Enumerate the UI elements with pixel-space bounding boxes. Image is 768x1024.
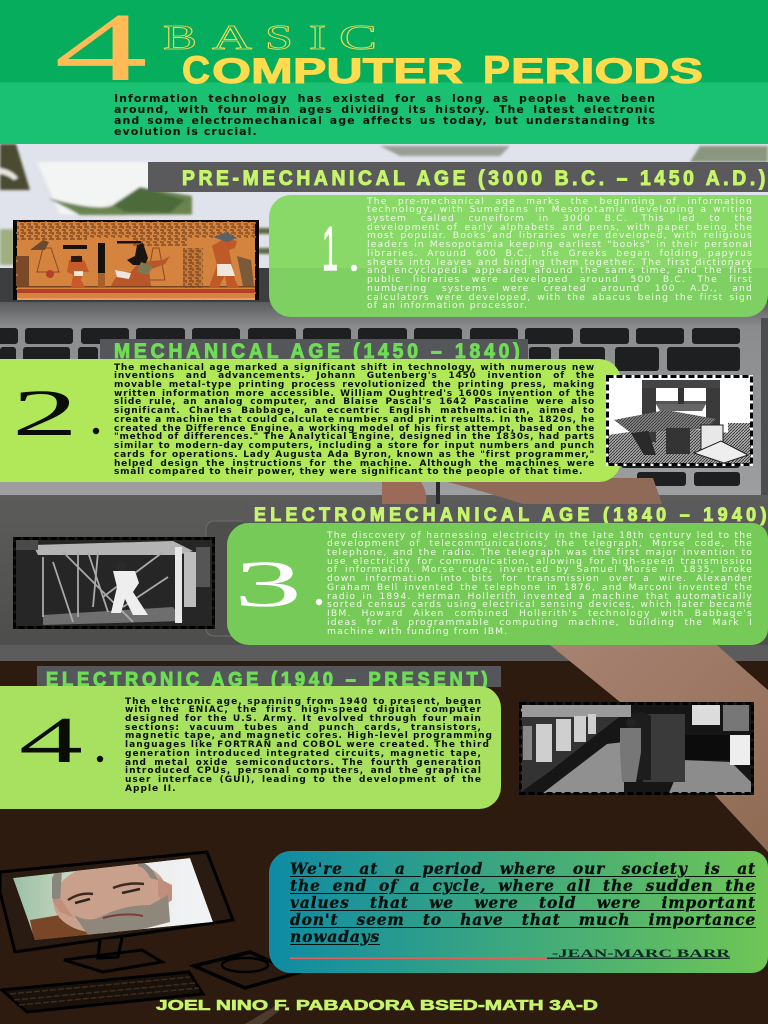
intro text: evolution is crucial. bbox=[114, 125, 258, 138]
heading bar: pre-mechanical age: PRE-MECHANICAL AGE (3000 B.C. – 1450 A.D.) bbox=[182, 167, 765, 190]
text: electromechanical age: use electricity for communication, allowing for high-speed transmission bbox=[327, 556, 753, 567]
panel: quote bbox=[269, 851, 768, 973]
text: electronic age: with the ENIAC, the first high-speed digital computer bbox=[125, 705, 482, 715]
number 2: 2 bbox=[12, 377, 78, 450]
portrait photo bbox=[13, 858, 213, 940]
number 1: 1 bbox=[322, 215, 338, 284]
quote text: We're at a period where our society is at bbox=[290, 859, 756, 878]
image: ENIAC computer bbox=[519, 702, 754, 795]
intro text: Information technology has existed for as long as people have been bbox=[114, 92, 656, 105]
text: electromechanical age: of information. Morse code, invented by Samuel Morse in 1835, broke bbox=[327, 564, 753, 575]
image: Egyptian papyrus bbox=[13, 220, 259, 300]
text: pre-mechanical age: leaders in Mesopotamia keeping earliest "books" in their personal bbox=[367, 239, 753, 250]
monitor screen frame bbox=[0, 852, 233, 952]
text: electronic age: sections: vacuum tubes and punch cards, transistors, bbox=[125, 723, 482, 733]
text: electromechanical age: development of telecommunications, the telegraph, Morse code, the bbox=[327, 538, 753, 549]
quote attribution: -JEAN-MARC BARR bbox=[552, 948, 731, 960]
mouse pad and mouse bbox=[194, 952, 297, 988]
word: Basic: C bbox=[339, 18, 377, 57]
number 4 bbox=[19, 704, 104, 777]
quote text: nowadays bbox=[290, 927, 380, 946]
text: electromechanical age: down information into bits for transmission over a wire. Alexander bbox=[327, 573, 753, 584]
text: pre-mechanical age: development of early alphabets and pens, with paper being the bbox=[367, 222, 753, 233]
text: pre-mechanical age: of an information processor. bbox=[367, 300, 528, 311]
text: mechanical age: small compared to their power, they were significant to the people of that time. bbox=[114, 467, 583, 477]
panel: electronic age bbox=[0, 686, 501, 809]
left figures bbox=[30, 240, 49, 250]
text: electromechanical age: sorted census cards using electrical sensing devices, which later became bbox=[327, 599, 753, 610]
text: mechanical age: slide rule, an analog computer, and Blaise Pascal's 1642 Pascaline were also bbox=[114, 397, 595, 407]
word: Basic: A bbox=[212, 18, 253, 57]
text: pre-mechanical age: libraries. Around 600 B.C., the Greeks began folding papyrus bbox=[367, 248, 753, 259]
text: pre-mechanical age: system called cuneiform in 3000 B.C. This led to the bbox=[367, 213, 753, 224]
image: punch card machine operator bbox=[13, 537, 215, 629]
quote text: don't seem to have that much importance bbox=[290, 910, 756, 929]
heading bar: mechanical age: MECHANICAL AGE (1450 – 1840) bbox=[114, 340, 520, 363]
text: mechanical age: cards for operations. Lady Augusta Ada Byron, known as the "first programmer," bbox=[114, 450, 595, 460]
text: electromechanical age: ideas for a programmable computing machine, building the Mark I bbox=[327, 617, 753, 628]
text: electromechanical age bbox=[326, 530, 753, 636]
text: electromechanical age: machine with funding from IBM. bbox=[327, 626, 508, 636]
text: electronic age: Apple II. bbox=[125, 784, 177, 794]
text: pre-mechanical age: calculators were developed, with the abacus being the first sign bbox=[367, 292, 753, 302]
Anubis bbox=[111, 256, 170, 286]
green header band bbox=[0, 0, 768, 144]
quote text: values that we were told were important bbox=[290, 893, 756, 912]
number 3: 3 bbox=[234, 548, 302, 621]
text: pre-mechanical age: technology, with Sumerians in Mesopotamia developing a writing bbox=[367, 204, 753, 215]
text: pre-mechanical age: and encyclopedia appeared around the same time, and the first bbox=[367, 265, 753, 276]
text: mechanical age: The mechanical age marked a significant shift in technology, with numerous new bbox=[114, 363, 595, 373]
right god bbox=[209, 238, 239, 287]
text: electronic age: and metal oxide semiconductors. The fourth generation bbox=[125, 758, 482, 768]
text: electronic age: magnetic tape, and magnetic cores. High-level programming bbox=[125, 731, 493, 741]
image: printing press bbox=[606, 375, 753, 466]
text: mechanical age: movable metal-type printing process revolutionized the printing press, making bbox=[114, 380, 595, 390]
text: mechanical age: written information more accessible. William Oughtred's 1600s invention of the bbox=[114, 389, 595, 399]
text: pre-mechanical age: most popular. Books and libraries were developed, with religious bbox=[367, 230, 753, 241]
panel: pre-mechanical age bbox=[269, 195, 768, 317]
text: mechanical age: significant. Charles Babbage, an eccentric English mathematician, aimed to bbox=[114, 406, 595, 416]
word: Basic: B bbox=[163, 18, 197, 57]
word: Basic: I bbox=[309, 18, 326, 57]
text: electronic age: generation introduced integrated circuits, magnetic tape, bbox=[125, 749, 482, 759]
panel: mechanical age bbox=[0, 359, 621, 482]
scale and beam bbox=[63, 245, 87, 249]
quote text: the end of a cycle, where all the sudden the bbox=[290, 876, 756, 895]
text: electronic age: The electronic age, spanning from 1940 to present, began bbox=[125, 697, 482, 707]
text: mechanical age: created the Difference Engine, a working model of his first attempt, based on the bbox=[114, 424, 595, 434]
words: Computer Periods: P bbox=[483, 49, 510, 92]
footer credit: JOEL NINO F. PABADORA BSED-MATH 3A-D bbox=[156, 998, 598, 1014]
keyboard bbox=[2, 972, 203, 1012]
number 4: 4 bbox=[19, 704, 83, 777]
words: Computer Periods: C bbox=[182, 49, 210, 92]
text: pre-mechanical age: public libraries were developed around 500 B.C. The first bbox=[367, 274, 753, 285]
text: pre-mechanical age: numbering systems were created around 100 A.D., and bbox=[367, 283, 753, 294]
text: electromechanical age: radio in 1894. Herman Hollerith invented a machine that automatically bbox=[327, 591, 753, 602]
number 3 bbox=[234, 548, 322, 621]
monitor stand and base bbox=[64, 938, 162, 972]
word: Basic: S bbox=[265, 18, 293, 57]
text: electronic age: user interface (GUI), leading to the development of the bbox=[125, 775, 482, 785]
text: electronic age: designed for the U.S. Army. It evolved through four main bbox=[125, 714, 482, 724]
text: electromechanical age: telephone, and the radio. The telegraph was the first major invention to bbox=[327, 547, 753, 558]
text: pre-mechanical age: The pre-mechanical age marks the beginning of information bbox=[367, 196, 753, 207]
title: 4 Basic Computer Periods bbox=[54, 0, 703, 102]
heading bar: electromechanical age: ELECTROMECHANICAL AGE (1840 – 1940) bbox=[254, 503, 766, 525]
intro text bbox=[114, 92, 656, 138]
text: electronic age: languages like FORTRAN and COBOL were created. The third bbox=[125, 740, 490, 750]
text: electromechanical age: The discovery of harnessing electricity in the late 18th century led to the bbox=[327, 530, 753, 541]
text: mechanical age: create a machine that could calculate numbers and print results. In the 1820s, he bbox=[114, 415, 595, 425]
text: electromechanical age: IBM. Howard Aiken combined Hollerith's technology with Babbage's bbox=[327, 608, 753, 619]
text: pre-mechanical age bbox=[366, 196, 753, 311]
intro text: and some electromechanical age affects us today, but understanding its bbox=[114, 114, 656, 127]
text: pre-mechanical age: sheets into leaves and binding them together. The first dictionary bbox=[367, 257, 753, 268]
text: electronic age bbox=[125, 697, 493, 794]
words: Computer Periods: OMPUTER bbox=[212, 52, 463, 91]
heading bar: electronic age: ELECTRONIC AGE (1940 – PRESENT) bbox=[46, 669, 488, 691]
text: mechanical age bbox=[114, 363, 595, 477]
text: electronic age: introduced CPUs, personal computers, and the graphical bbox=[125, 766, 482, 776]
text: mechanical age: inventions and advancements. Johann Gutenberg's 1450 invention of the bbox=[114, 371, 595, 381]
text: mechanical age: helped design the instructions for the machine. Although the machines were bbox=[114, 458, 595, 468]
text: mechanical age: similar to modern-day computers, including a store for input numbers and punch bbox=[114, 441, 595, 451]
text: mechanical age: "method of differences." The Analytical Engine, designed in the 1830s, had parts bbox=[114, 432, 595, 442]
illustration: desktop computer with portrait bbox=[0, 850, 302, 1014]
words: Computer Periods: ERIODS bbox=[511, 52, 703, 91]
text: electromechanical age: Graham Bell invented the telephone in 1876, and Marconi invented the bbox=[327, 582, 753, 593]
quote text bbox=[290, 859, 756, 946]
number 2 bbox=[12, 377, 100, 450]
intro text: around, with four main ages dividing its history. The latest electronic bbox=[114, 103, 656, 116]
panel: electromechanical age bbox=[227, 523, 768, 645]
